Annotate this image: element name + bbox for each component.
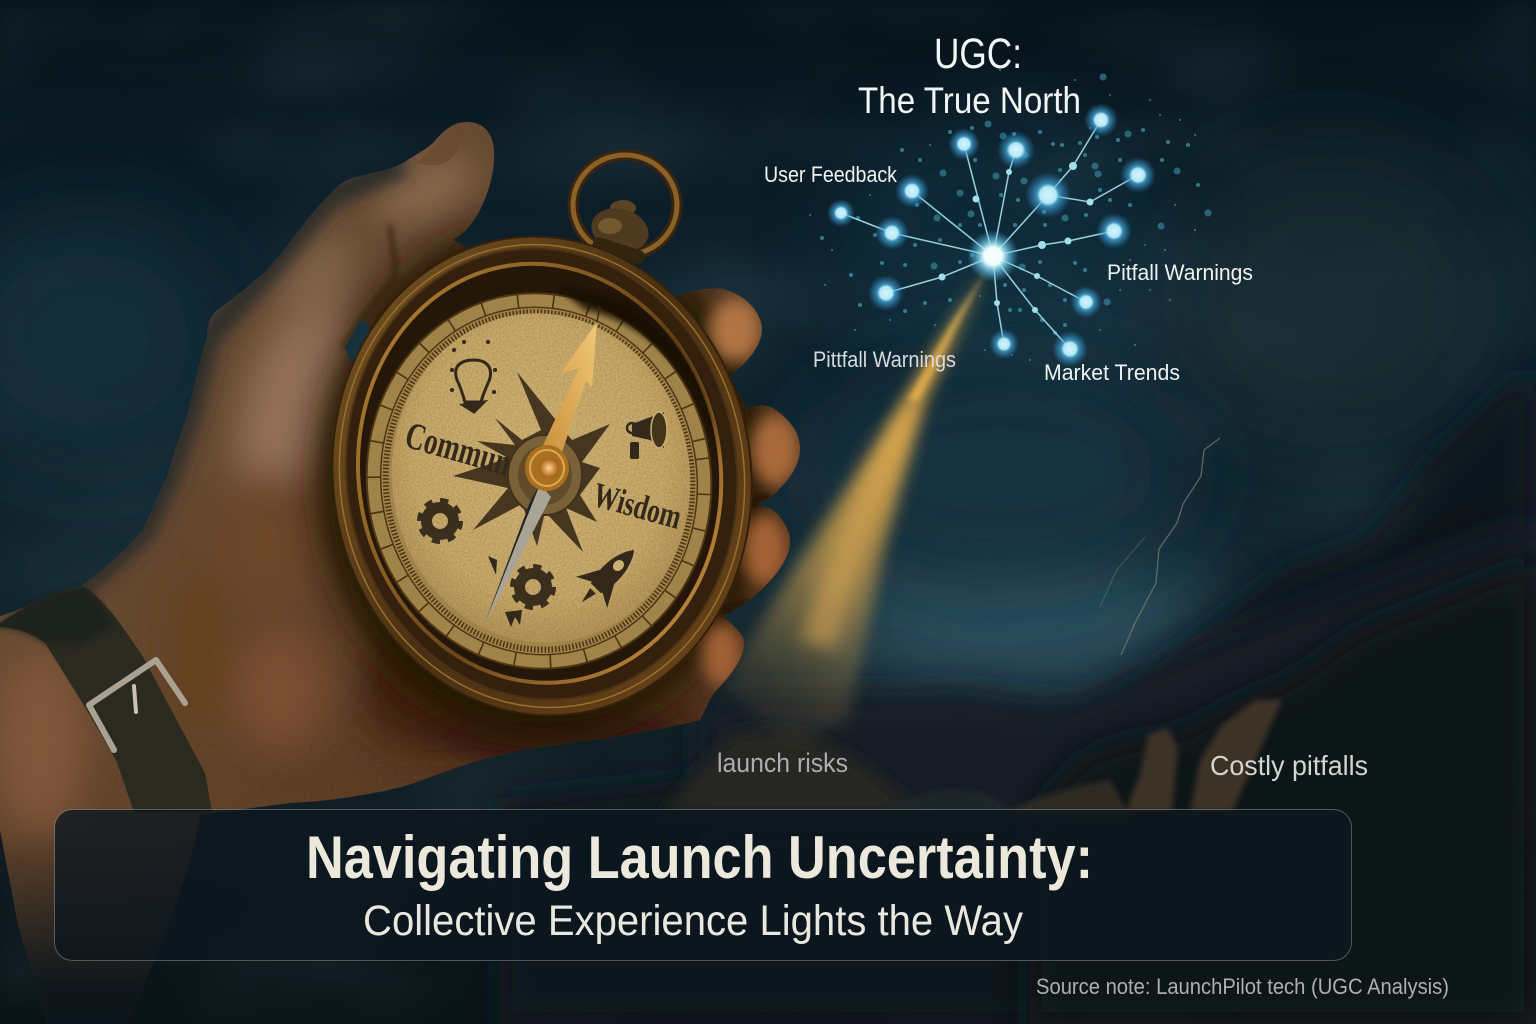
icon: megaphone: [627, 412, 667, 459]
finger gaps: [720, 376, 770, 612]
compass needle north: [540, 306, 600, 458]
label: launch risks: launch risks: [717, 748, 848, 778]
subtitle: Collective Experience Lights the Way: [363, 897, 1023, 945]
thumb crease: [342, 225, 395, 350]
compass parchment face: [392, 313, 690, 643]
hand dark back edge: [80, 163, 403, 587]
compass needle south: [483, 484, 551, 628]
source note: Source note: LaunchPilot tech (UGC Analysis): [1036, 974, 1449, 999]
gap between thumb and compass: [345, 318, 372, 365]
heading: UGC The True North: [858, 30, 1081, 121]
label: Pittfall Warnings left: Pittfall Warnings: [813, 347, 956, 372]
icon: lower gear: [513, 567, 553, 607]
icon: light bulb: [452, 342, 495, 412]
lightning bolt: [1100, 438, 1220, 655]
compass pendant ring: [573, 155, 677, 266]
compass case: [302, 209, 782, 743]
shadow on dial: [560, 290, 720, 470]
label: User Feedback: User Feedback: [764, 162, 898, 187]
icon: left gear: [420, 501, 460, 541]
scattered particles: [810, 70, 1208, 360]
compass text: Wisdom: Wisdom: [589, 475, 686, 537]
thumb nail: [418, 146, 457, 165]
icon: rocket: [566, 534, 650, 618]
network central star: [967, 230, 1019, 282]
UGC network constellation: [810, 70, 1208, 367]
network small junction nodes: [938, 162, 1094, 313]
arm fade under panel: [3, 843, 175, 1024]
compass pivot: [525, 445, 569, 491]
main title: Navigating Launch Uncertainty:: [306, 824, 1093, 891]
mountains and valley: [500, 360, 1536, 1024]
label: Pitfall Warnings right: Pitfall Warnings: [1107, 260, 1253, 285]
heading: UGC The True North: UGC:: [934, 30, 1022, 78]
compass star rose: [453, 372, 610, 552]
compass dial scale: [343, 271, 735, 691]
icon: partial marks: [488, 556, 522, 627]
brass compass: [332, 236, 752, 716]
label: Market Trends: Market Trends: [1044, 360, 1180, 385]
hand highlights: [0, 141, 690, 830]
golden light beam: [722, 268, 988, 745]
compass center disc: [508, 435, 582, 515]
network glowing nodes: [827, 103, 1156, 367]
heading: UGC The True North: The True North: [858, 80, 1081, 121]
network links: [841, 120, 1138, 349]
leather watch strap and buckle: [0, 587, 212, 812]
buckle: [89, 660, 185, 750]
hand holding compass: [0, 100, 820, 1024]
shadow around compass: [316, 220, 768, 736]
compass text: Commun: Commun: [401, 414, 516, 484]
fingertips: [702, 298, 799, 687]
title panel: [54, 810, 1352, 960]
label: Costly pitfalls: Costly pitfalls: [1210, 750, 1368, 781]
